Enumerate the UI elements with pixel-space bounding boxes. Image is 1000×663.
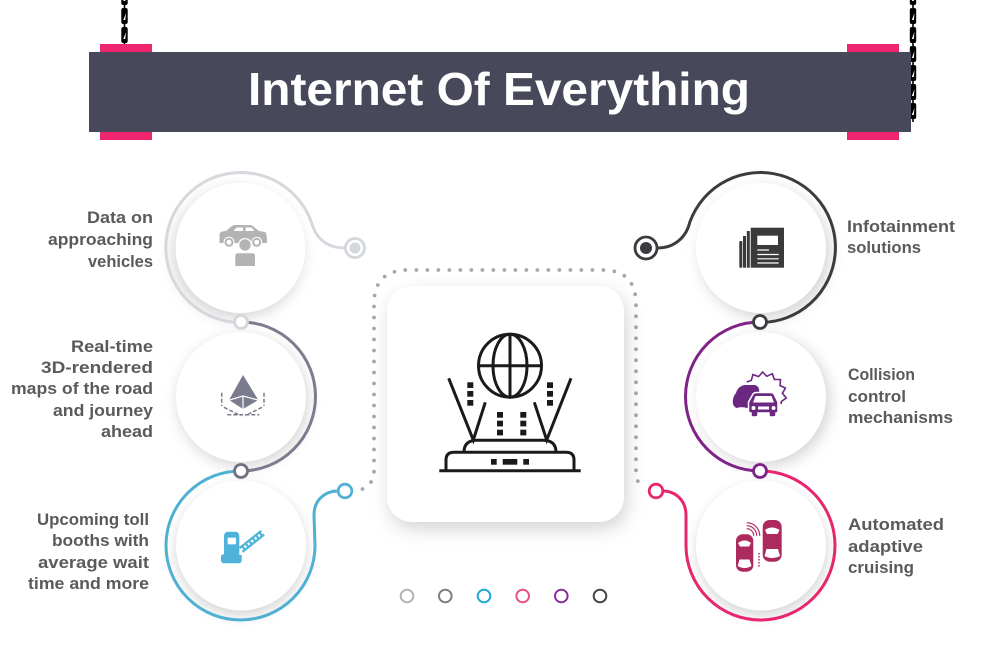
icon: newspaper [739,228,784,268]
icon: car and person [220,225,267,266]
panel: collision control [686,322,953,471]
node: blue endpoint [338,484,352,498]
ring connector [166,173,345,323]
node: purple to pink joint [754,464,766,478]
label [848,515,944,577]
node: dark to purple joint [754,316,766,328]
circle [696,183,826,313]
hanging chain left [121,0,128,46]
icon: 3D map pyramid [222,375,264,416]
circle [176,332,306,462]
panel: 3D rendered maps [11,322,316,471]
panel: centre card with hologram globe [387,286,624,522]
circle [176,480,306,610]
label: Real-time [71,337,153,356]
label: and journey [53,401,154,420]
label: approaching [48,230,153,249]
hanging chain right [910,0,916,122]
label [847,217,955,257]
label: vehicles [88,252,153,271]
label: cruising [848,558,914,577]
label: Infotainment [847,217,955,236]
banner bar [89,52,911,132]
label: Upcoming toll [37,510,149,529]
ring connector [241,322,316,471]
node: slate to blue joint [234,464,248,478]
label: adaptive [848,537,923,556]
icon: toll barrier [221,532,263,563]
ring connector [166,471,338,620]
label: Data on [87,208,153,227]
label: average wait [38,553,149,572]
label: maps of the road [11,379,153,398]
circle [176,183,306,313]
label: ahead [101,422,153,441]
pink bracket right [847,44,899,140]
label: mechanisms [848,408,953,427]
circle [696,480,826,610]
panel: toll booths [28,471,338,620]
title banner [89,44,911,140]
label [848,365,953,427]
label [11,337,154,441]
pagination dots [401,590,606,602]
label [28,510,149,593]
label: Collision [848,365,915,384]
panel: approaching vehicles [48,173,345,323]
circle [696,332,826,462]
label: booths with [52,531,149,550]
panel: infotainment [658,173,955,323]
pink bracket left [100,44,152,140]
label: control [848,387,906,406]
label: time and more [28,574,149,593]
icon: adaptive cruising cars [736,520,782,572]
title: Internet Of Everything [248,63,750,115]
label: Automated [848,515,944,534]
label: 3D-rendered [41,358,153,377]
icon: collision cars [733,372,786,417]
node: dark endpoint [635,237,657,259]
icon: hologram globe [439,333,581,471]
node: pink endpoint [649,484,663,498]
node: light grey endpoint [346,238,364,258]
card [387,286,624,522]
label [48,208,153,271]
label: solutions [847,238,921,257]
node: light grey to slate joint [234,316,248,328]
ring connector [663,471,835,620]
ring connector [686,322,760,471]
dotted connector around centre card [362,270,644,489]
panel: adaptive cruising [663,471,944,620]
ring connector [658,173,835,323]
